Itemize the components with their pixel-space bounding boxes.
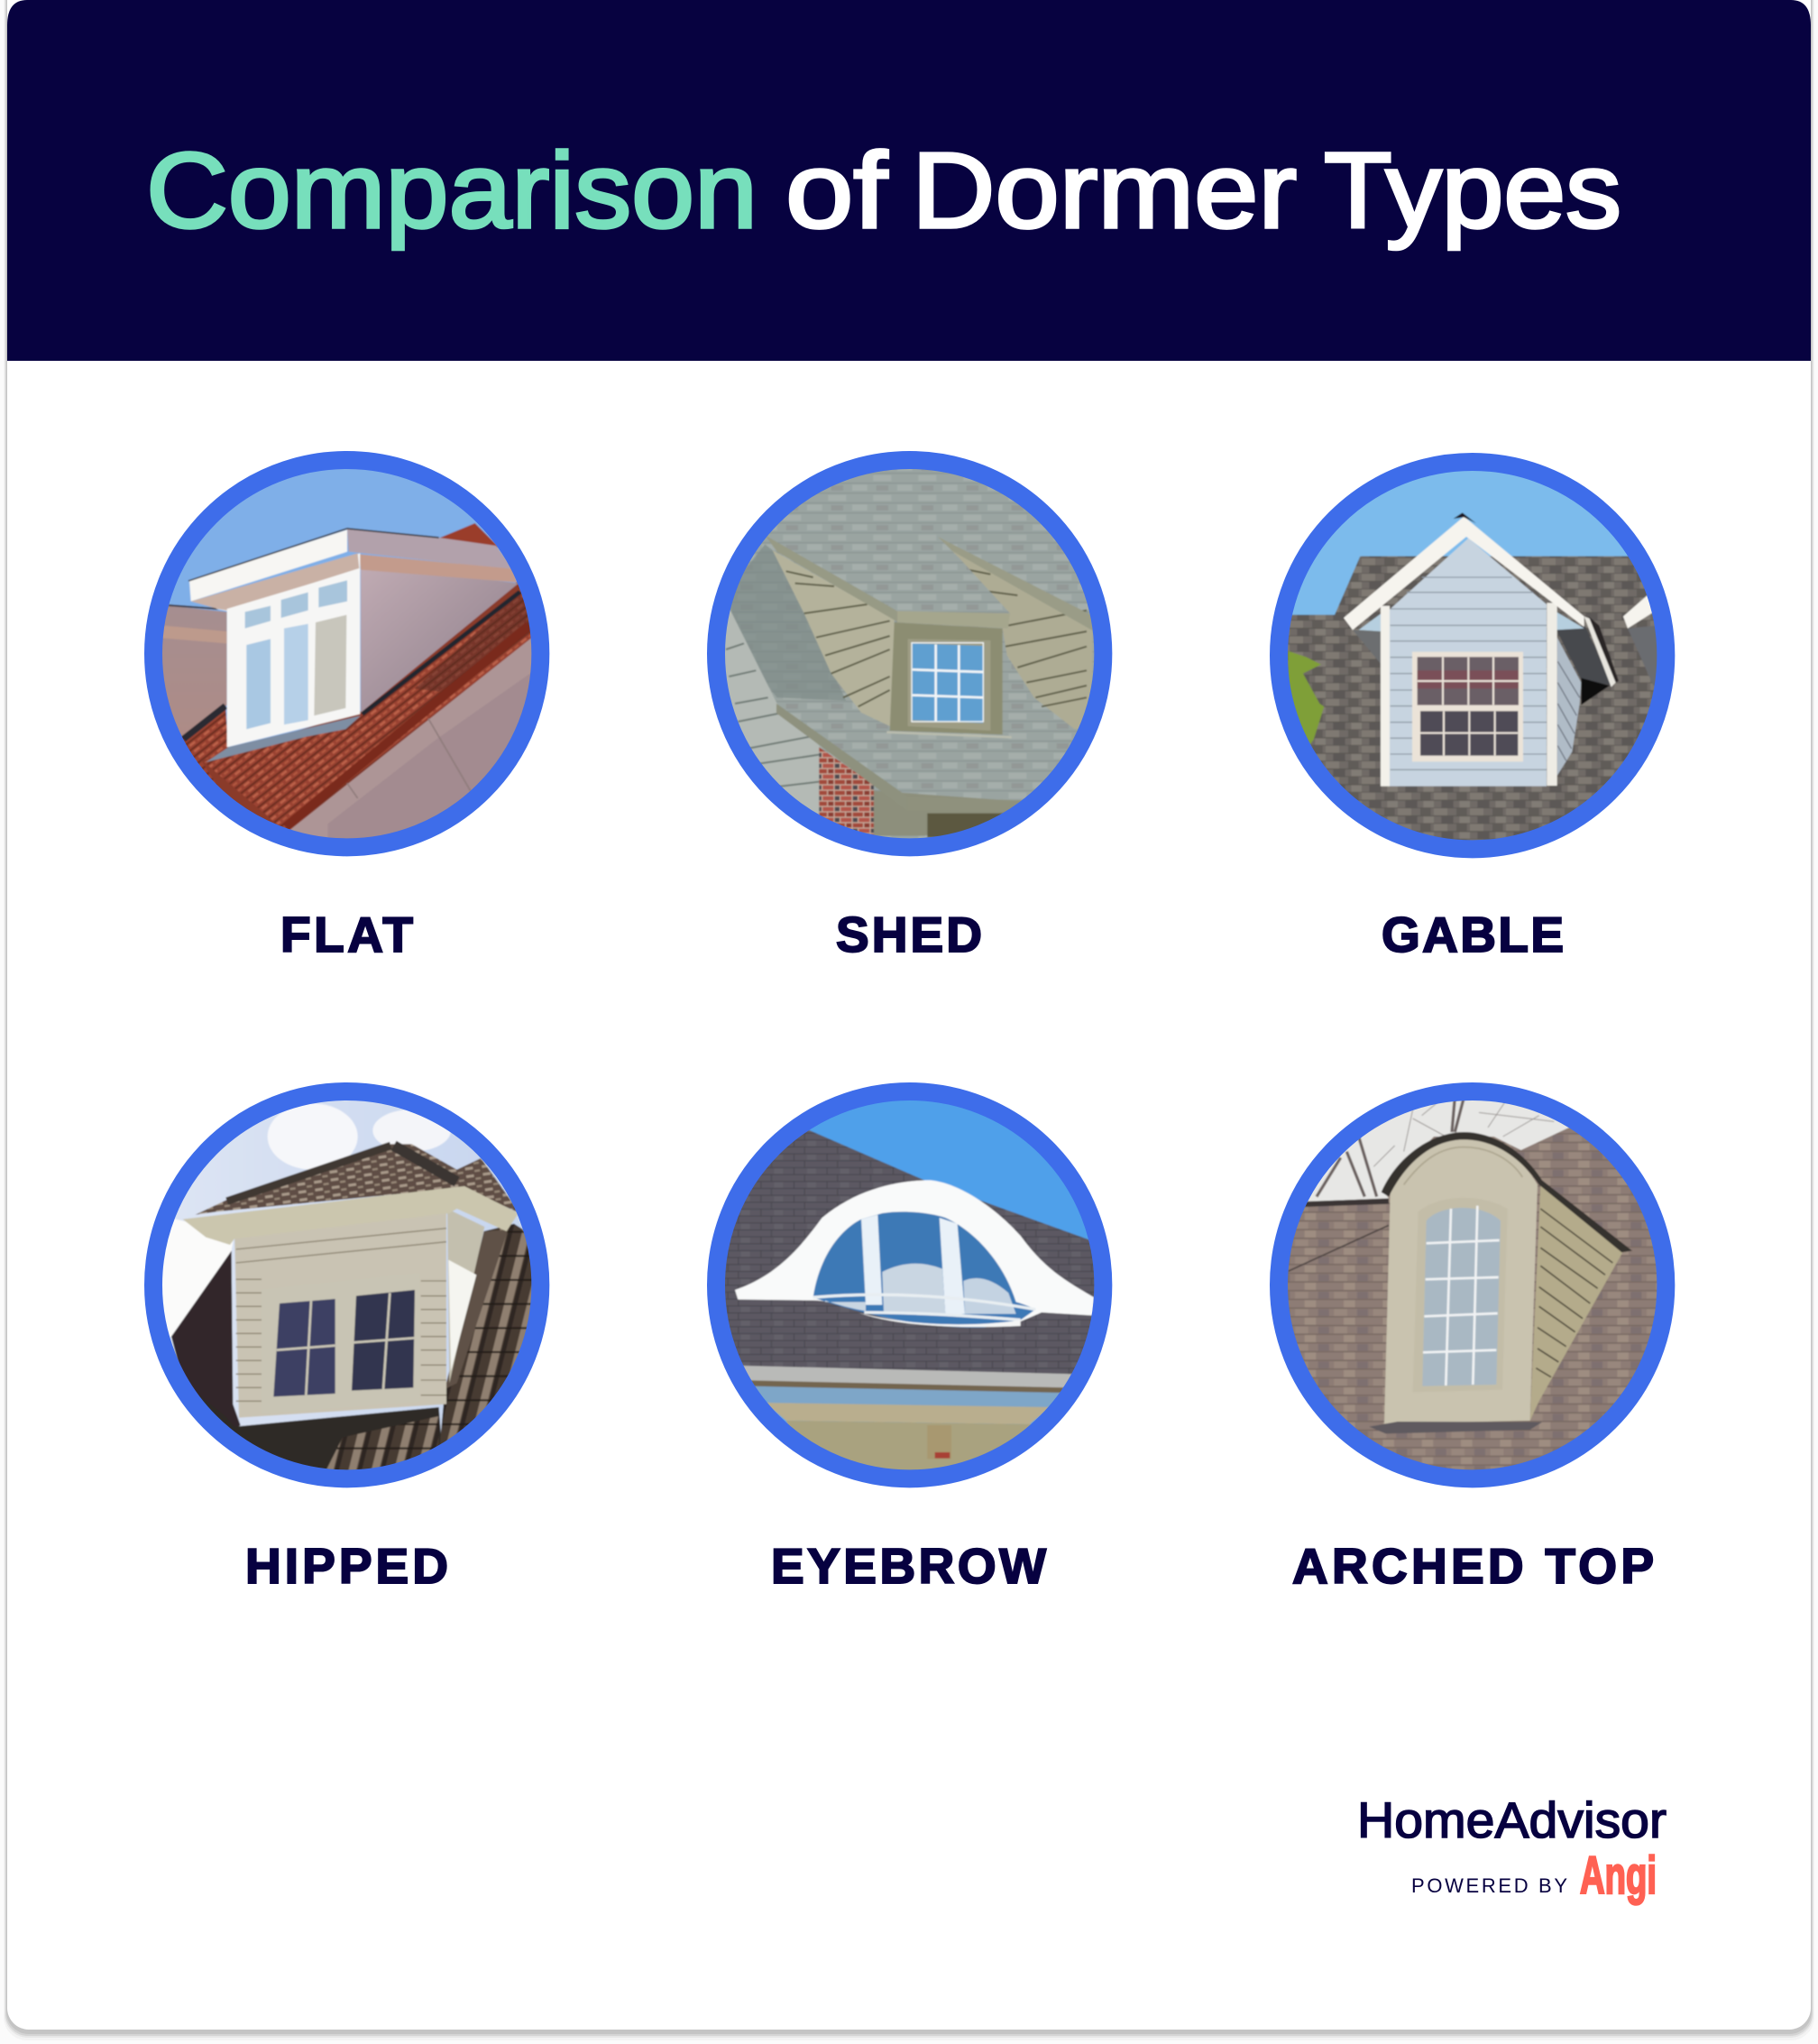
title: Comparison xyxy=(146,131,758,251)
title: Types xyxy=(1324,131,1621,251)
header band xyxy=(7,0,1811,361)
label: flat: FLAT xyxy=(280,907,413,962)
title: of xyxy=(785,131,888,251)
panel: gable dormer photo xyxy=(1270,453,1676,859)
title xyxy=(146,131,1621,251)
panel: flat dormer photo xyxy=(144,451,550,857)
label: arched top: ARCHED TOP xyxy=(1292,1538,1654,1594)
title: Dormer xyxy=(912,131,1297,251)
label: shed: SHED xyxy=(836,907,982,962)
panel: arched top dormer photo xyxy=(1270,1082,1676,1488)
logo: HomeAdvisor powered by Angi: Angi xyxy=(1580,1846,1657,1905)
logo: HomeAdvisor powered by Angi: POWERED BY xyxy=(1411,1874,1567,1897)
panel: shed dormer photo xyxy=(707,451,1113,857)
label: gable: GABLE xyxy=(1382,907,1564,962)
label: eyebrow: EYEBROW xyxy=(771,1538,1046,1594)
logo: HomeAdvisor powered by Angi: HomeAdvisor xyxy=(1357,1791,1666,1848)
label: hipped: HIPPED xyxy=(245,1538,448,1594)
panel: hipped dormer photo xyxy=(144,1082,550,1488)
panel: eyebrow dormer photo xyxy=(707,1082,1113,1488)
logo: HomeAdvisor powered by Angi xyxy=(1357,1791,1666,1905)
